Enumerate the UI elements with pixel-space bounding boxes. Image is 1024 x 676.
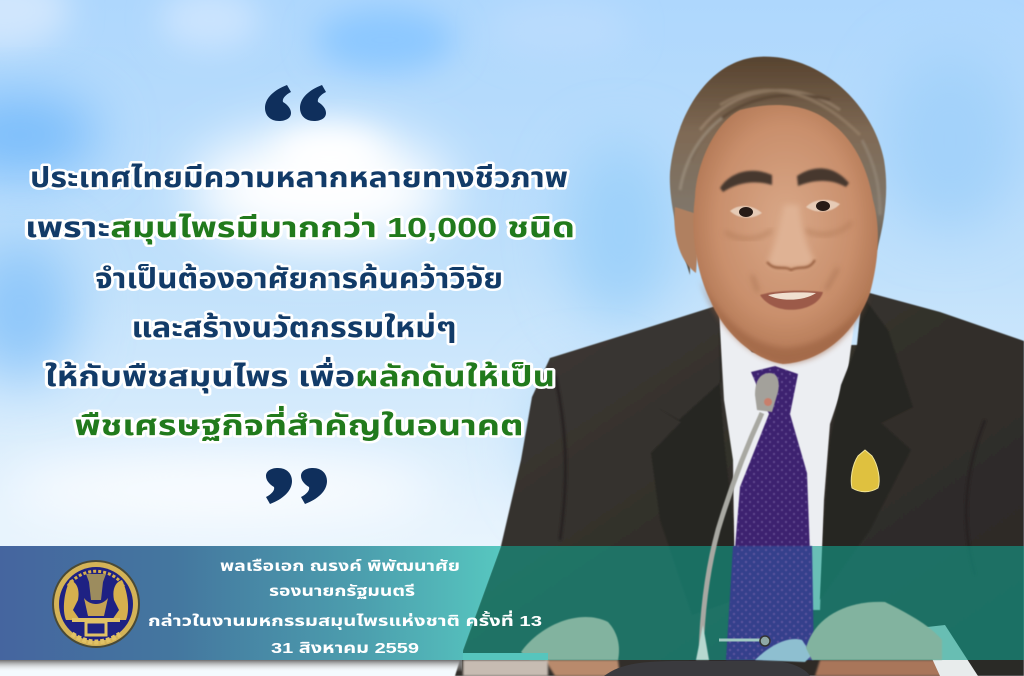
quote text: ประเทศไทยมีความหลากหลายทางชีวภาพ — [30, 162, 568, 193]
face — [693, 105, 878, 364]
shirt cuff — [918, 625, 978, 676]
quotation mark: opening — [265, 85, 326, 121]
banner text: 31 สิงหาคม 2559 — [271, 640, 419, 657]
quote text: ให้กับพืชสมุนไพร เพื่อ ผลักดันให้เป็น — [45, 356, 555, 393]
seal emblem — [52, 560, 140, 648]
handkerchief — [755, 639, 812, 662]
banner text: พลเรือเอก ณรงค์ พิพัฒนาศัย — [220, 558, 460, 575]
quote text: และสร้างนวัตกรรมใหม่ๆ — [132, 312, 456, 343]
tie clip — [719, 636, 770, 646]
hair — [670, 57, 886, 275]
seal: urn — [86, 574, 106, 600]
desk microphone base — [604, 661, 810, 676]
necktie — [726, 366, 814, 660]
quote text: เพราะ สมุนไพรมีมากกว่า 10,000 ชนิด — [25, 212, 575, 244]
jacket sleeve folds — [555, 375, 985, 575]
head — [670, 57, 886, 364]
seal: base — [72, 618, 120, 622]
banner text: กล่าวในงานมหกรรมสมุนไพรแห่งชาติ ครั้งที่ 13 — [148, 610, 542, 630]
lower left photo area — [463, 660, 548, 676]
hair streaks — [680, 90, 880, 215]
quote text — [25, 162, 575, 441]
ear — [674, 207, 700, 273]
hands below banner — [545, 625, 978, 676]
banner: translucent teal overlay over photo — [460, 546, 1024, 660]
seal: guardian lions — [64, 580, 80, 620]
microphone stem and head — [696, 373, 779, 660]
banner text — [148, 558, 542, 657]
quotation mark: closing — [266, 468, 327, 504]
bottom shadow under band — [0, 660, 462, 672]
lapel pin — [851, 450, 879, 492]
facial features — [720, 168, 852, 310]
quote text: จำเป็นต้องอาศัยการค้นคว้าวิจัย — [95, 263, 503, 294]
banner: left solid gradient and speaker attribution — [0, 546, 548, 660]
banner background — [0, 546, 501, 660]
left hand under overlay — [521, 617, 619, 660]
quote text: พืชเศรษฐกิจที่สำคัญในอนาคต — [74, 405, 524, 441]
suit jacket — [455, 292, 1024, 676]
lapels — [651, 295, 913, 615]
shirt collar — [719, 310, 856, 610]
cheek and jaw shading — [700, 280, 870, 364]
right hand over tie — [806, 602, 942, 660]
photo: speaker at microphone — [455, 292, 1024, 676]
banner text: รองนายกรัฐมนตรี — [269, 583, 415, 600]
